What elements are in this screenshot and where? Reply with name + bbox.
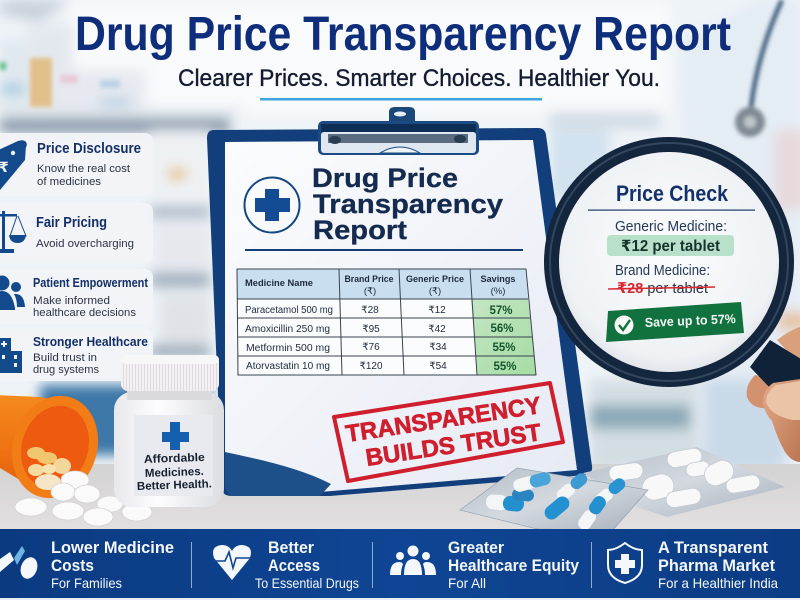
subtitle: Clearer Prices. Smarter Choices. Healthier You. — [178, 65, 660, 92]
benefit: lower medicine costs — [0, 538, 174, 591]
card: patient empowerment: healthcare decisions — [33, 307, 136, 319]
price comparison table: (₹) — [364, 286, 376, 297]
stamp: transparency builds trust: TRANSPARENCY — [344, 392, 543, 448]
clipboard report title: Report — [313, 215, 407, 245]
shelf product boxes — [0, 58, 120, 107]
price comparison table: ₹34 — [429, 342, 447, 353]
benefit: better access: To Essential Drugs — [255, 575, 359, 591]
icon: hospital building — [0, 338, 22, 373]
benefit: greater healthcare equity: For All — [448, 575, 486, 591]
icon: price tag — [0, 140, 26, 190]
magnifying glass — [544, 137, 800, 462]
price comparison table: ₹12 — [428, 305, 446, 316]
blue and white capsules — [485, 471, 628, 532]
card: stronger healthcare: Stronger Healthcare — [33, 334, 148, 349]
stamp: transparency builds trust — [334, 383, 563, 481]
back blister pack — [583, 447, 785, 517]
benefit: better access: Access — [268, 556, 320, 575]
price comparison table: ₹28 — [361, 305, 379, 316]
price comparison table: 57% — [489, 305, 513, 317]
desk surface — [0, 464, 800, 530]
clipboard folder corner — [225, 452, 331, 496]
benefit: greater healthcare equity: Healthcare Equity — [448, 556, 579, 575]
savings badge — [606, 302, 744, 342]
paper sheet — [225, 140, 577, 492]
report cross icon — [244, 178, 300, 232]
card: patient empowerment: Make informed — [33, 295, 110, 307]
price comparison table: ₹120 — [359, 361, 383, 372]
price comparison table: Medicine Name — [245, 278, 313, 289]
price comparison table: Brand Price — [344, 274, 394, 285]
panel: benefit cards — [0, 133, 153, 381]
price comparison table: ₹42 — [428, 324, 446, 335]
card: price disclosure: of medicines — [37, 176, 102, 188]
price comparison table: (%) — [491, 286, 505, 297]
price comparison table — [237, 269, 536, 375]
price comparison table: 56% — [490, 323, 514, 335]
icon: people — [0, 276, 25, 310]
card: price disclosure: Know the real cost — [37, 163, 130, 175]
subtitle underline — [260, 98, 542, 100]
jar label text: Medicines. — [145, 466, 204, 480]
price comparison table: ₹95 — [362, 324, 380, 335]
magnifying glass: Price Check — [616, 181, 729, 206]
icon: shield with cross — [608, 543, 642, 583]
price comparison table: Savings — [480, 274, 516, 285]
stamp: transparency builds trust: BUILDS TRUST — [364, 419, 543, 472]
stethoscope — [735, 0, 782, 137]
jar label text: Better Health. — [137, 478, 212, 493]
price comparison table: (₹) — [429, 286, 441, 297]
icon: group of people — [390, 546, 436, 575]
benefit: greater healthcare equity — [390, 538, 579, 591]
struck-through brand price: ₹28 per tablet — [617, 280, 709, 297]
price comparison table: ₹54 — [429, 361, 447, 372]
price comparison table: 55% — [493, 361, 517, 373]
card: stronger healthcare: Build trust in — [33, 352, 97, 364]
card: patient empowerment — [0, 269, 153, 324]
price comparison table: Amoxicillin 250 mg — [245, 324, 330, 335]
bottom benefit band — [0, 529, 800, 598]
card: stronger healthcare: drug systems — [33, 364, 99, 376]
generic price highlight — [607, 235, 734, 256]
benefit: lower medicine costs: Lower Medicine — [51, 538, 174, 557]
price comparison table: ₹76 — [362, 342, 380, 353]
benefit: transparent pharma market: A Transparent — [658, 538, 768, 557]
icon: pills — [0, 546, 40, 581]
benefit: transparent pharma market: Pharma Market — [658, 556, 775, 575]
benefit: better access: Better — [268, 538, 314, 557]
benefit: transparent pharma market — [608, 538, 778, 591]
card: price disclosure: Price Disclosure — [37, 141, 141, 157]
icon: scales — [0, 211, 26, 253]
front blister pack — [460, 468, 648, 532]
price comparison table: Generic Price — [406, 274, 464, 285]
card: fair pricing: Avoid overcharging — [36, 238, 134, 250]
clipboard — [207, 107, 592, 496]
benefit: better access — [213, 538, 359, 591]
card: patient empowerment: Patient Empowerment — [33, 276, 149, 290]
card: stronger healthcare — [0, 329, 153, 381]
savings badge: Save up to 57% — [644, 311, 736, 330]
orange pill bottle — [0, 385, 111, 509]
card: price disclosure — [0, 133, 153, 196]
clipboard report title — [312, 163, 503, 245]
icon: heart with pulse — [213, 545, 251, 580]
jar label text — [137, 452, 212, 493]
hand and handle — [747, 327, 800, 462]
magnifying glass: Brand Medicine: — [615, 262, 710, 279]
bottom pale strip — [0, 598, 800, 600]
clipboard report title: Transparency — [313, 189, 503, 219]
white medicine jar — [114, 355, 224, 507]
benefit: greater healthcare equity: Greater — [448, 538, 504, 557]
magnifying glass: Generic Medicine: — [615, 218, 727, 235]
card: fair pricing — [0, 203, 153, 263]
icon: jar cross — [162, 422, 189, 450]
price comparison table: Metformin 500 mg — [246, 343, 330, 354]
title: Drug Price Transparency Report — [75, 8, 731, 61]
price comparison table: Paracetamol 500 mg — [245, 305, 333, 316]
benefit: transparent pharma market: For a Healthier India — [658, 575, 778, 591]
clipboard report title: Drug Price — [312, 163, 458, 193]
price comparison table: Atorvastatin 10 mg — [246, 361, 330, 372]
loose white pills — [15, 471, 152, 526]
price comparison table: 55% — [492, 342, 516, 354]
card: fair pricing: Fair Pricing — [36, 215, 107, 231]
metal clip — [318, 107, 479, 155]
benefit: lower medicine costs: Costs — [51, 556, 94, 575]
generic price highlight: ₹12 per tablet — [621, 238, 720, 255]
jar label text: Affordable — [144, 452, 205, 466]
benefit: lower medicine costs: For Families — [51, 575, 122, 591]
